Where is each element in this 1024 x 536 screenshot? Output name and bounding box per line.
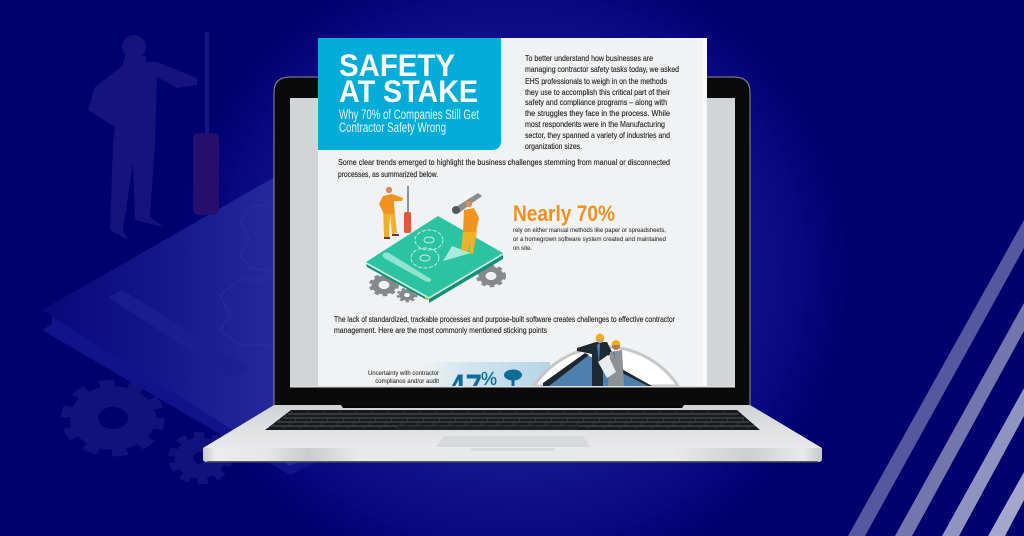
book pages xyxy=(366,253,503,300)
stat number: Nearly 70% xyxy=(513,201,615,226)
intro paragraph: EHS professionals to weigh in on the methods xyxy=(525,77,667,86)
cover label bar xyxy=(382,252,431,282)
ghost gear small xyxy=(172,435,228,481)
key gaps xyxy=(268,412,758,428)
intro paragraph xyxy=(525,54,679,151)
challenges paragraph xyxy=(334,315,675,335)
ghost illustration: worker and book xyxy=(42,32,340,481)
screen bottom edge xyxy=(290,386,735,388)
challenges paragraph: The lack of standardized, trackable processes and purpose-built software creates challenges to effective contractor xyxy=(334,315,675,324)
band number: 47 xyxy=(449,368,482,407)
roof edge xyxy=(543,353,652,386)
document page on screen xyxy=(318,38,707,407)
gear right xyxy=(478,266,504,286)
ghost book cover xyxy=(42,178,340,466)
lip notch xyxy=(471,448,554,451)
stat description: rely on either manual methods like paper or spreadsheets, xyxy=(513,228,666,234)
stat description: on site. xyxy=(513,246,532,252)
lid bezel xyxy=(274,77,750,406)
gear small xyxy=(398,289,416,301)
ghost cover gears xyxy=(220,205,272,345)
page background xyxy=(318,38,707,386)
ghost screwdriver xyxy=(193,32,219,215)
trends paragraph xyxy=(338,158,670,179)
intro paragraph: To better understand how businesses are xyxy=(525,54,653,63)
spine accent xyxy=(425,296,429,300)
ghost worker silhouette xyxy=(88,35,197,240)
trends paragraph: processes, as summarized below. xyxy=(338,170,438,179)
intro paragraph: organization sizes. xyxy=(525,142,582,151)
challenges paragraph: management. Here are the most commonly mentioned sticking points xyxy=(334,326,547,335)
band label: Uncertainty with contractor xyxy=(368,371,439,377)
title: SAFETY xyxy=(339,47,455,83)
cover gears outline xyxy=(411,230,443,268)
stat description xyxy=(513,228,666,252)
circle badge xyxy=(534,347,678,386)
pin icon xyxy=(504,370,522,386)
subtitle xyxy=(339,107,479,135)
front lip xyxy=(203,448,822,462)
intro paragraph: they use to accomplish this critical part of their xyxy=(525,88,670,97)
laptop base xyxy=(203,405,822,462)
man in grey xyxy=(608,340,624,386)
illustration: book with workers xyxy=(366,186,504,303)
band label: compliance and/or audit xyxy=(375,379,439,385)
trackpad xyxy=(436,436,590,447)
blueprint sheet xyxy=(598,355,616,378)
man in suit xyxy=(577,334,612,386)
gear left xyxy=(371,275,397,295)
decorative diagonal stripes xyxy=(848,220,1024,536)
title panel xyxy=(318,38,501,150)
band label xyxy=(368,371,439,385)
intro paragraph: sector, they spanned a variety of industries and xyxy=(525,131,670,140)
laptop lid xyxy=(274,77,750,409)
screwdriver xyxy=(404,186,411,233)
stat: nearly 70% xyxy=(513,201,666,252)
book spine xyxy=(366,255,503,303)
intro paragraph: safety and compliance programs – along with xyxy=(525,98,667,107)
worker right with wrench xyxy=(452,193,482,254)
screen xyxy=(290,98,735,387)
roof xyxy=(543,354,652,386)
page right edge xyxy=(703,38,707,386)
laptop bezel lower strip xyxy=(274,388,750,406)
intro paragraph: managing contractor safety tasks today, we asked xyxy=(525,65,679,74)
illustration: supervisors and roof xyxy=(534,334,678,386)
intro paragraph: the struggles they face in the process. While xyxy=(525,109,671,118)
deck xyxy=(203,405,822,448)
lip shadow xyxy=(207,461,818,462)
spacebar xyxy=(398,426,578,430)
band background xyxy=(420,362,550,386)
book cover xyxy=(366,216,503,297)
background glow xyxy=(160,0,864,536)
title xyxy=(339,47,478,109)
intro paragraph: most respondents were in the Manufacturing xyxy=(525,120,665,129)
ghost book spine xyxy=(42,316,340,475)
stat description: or a homegrown software system created and maintained xyxy=(513,237,666,243)
title: AT STAKE xyxy=(339,73,478,109)
subtitle: Why 70% of Companies Still Get xyxy=(339,107,479,122)
stat band 47% xyxy=(368,362,550,407)
subtitle: Contractor Safety Wrong xyxy=(339,120,446,135)
ghost gear large xyxy=(67,384,159,452)
cover arrow shape xyxy=(443,246,471,261)
keyboard xyxy=(265,410,760,430)
trends paragraph: Some clear trends emerged to highlight the business challenges stemming from manual or disconnected xyxy=(338,158,670,167)
worker left xyxy=(379,187,403,239)
ghost book label bar xyxy=(108,290,250,378)
hinge xyxy=(341,404,684,409)
band percent sign: % xyxy=(481,369,497,389)
